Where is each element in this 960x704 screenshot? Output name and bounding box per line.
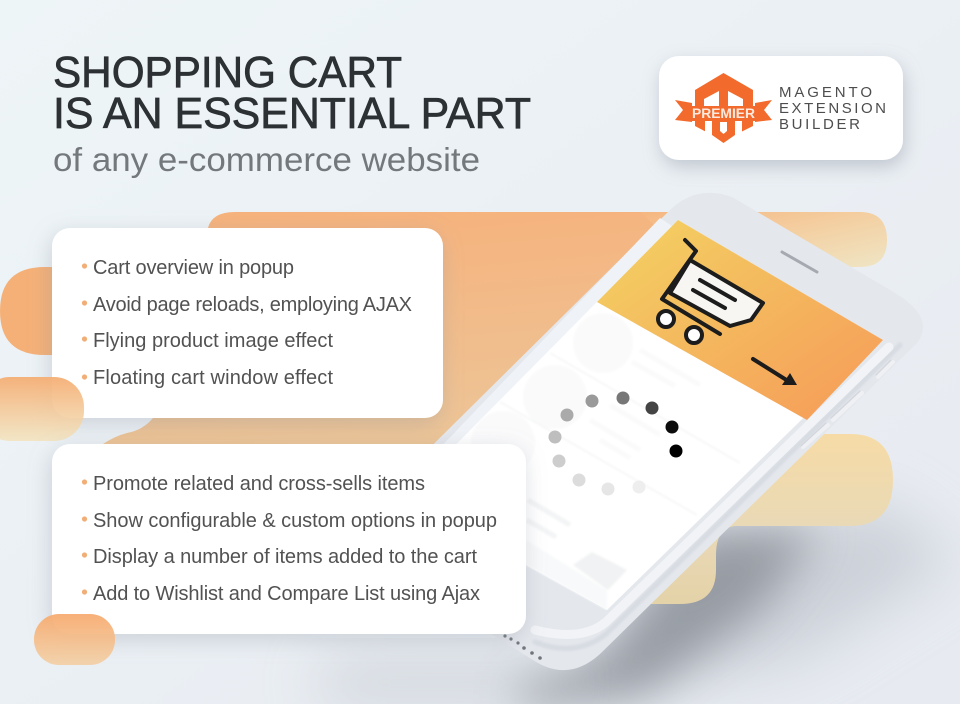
panel: features bottom <box>52 444 526 634</box>
phone <box>358 193 923 670</box>
list item: Add to Wishlist and Compare List using Ajax <box>93 583 480 605</box>
phone body <box>358 193 923 670</box>
icon: premier badge: PREMIER <box>692 106 755 121</box>
phone drop shadow <box>320 500 960 704</box>
phone inner light rim <box>390 218 672 508</box>
screen banner <box>597 220 883 420</box>
title <box>53 49 531 178</box>
small orange pill <box>34 614 115 665</box>
logo card <box>659 56 903 160</box>
logo text <box>779 84 886 133</box>
screen <box>411 220 883 610</box>
list item: Promote related and cross-sells items <box>93 473 425 495</box>
decorative orange shapes <box>0 212 893 604</box>
list item: Show configurable & custom options in popup <box>93 510 497 532</box>
title: IS AN ESSENTIAL PART <box>53 90 531 138</box>
speaker holes <box>503 634 542 660</box>
icon: arrow <box>753 359 797 385</box>
logo text: EXTENSION <box>779 100 886 117</box>
icon: premier badge <box>675 73 772 143</box>
small translucent pill <box>0 377 84 441</box>
list item: Floating cart window effect <box>93 367 333 389</box>
loading spinner dots <box>548 392 682 496</box>
list item: Cart overview in popup <box>93 257 294 279</box>
panel: features top <box>52 228 443 418</box>
list item: Flying product image effect <box>93 330 333 352</box>
list item: Display a number of items added to the cart <box>93 546 477 568</box>
faint screen content <box>471 313 740 610</box>
logo text: BUILDER <box>779 116 860 133</box>
side buttons <box>801 360 893 447</box>
phone rim bands <box>535 345 900 648</box>
list item: Avoid page reloads, employing AJAX <box>93 294 412 316</box>
speaker <box>782 252 817 272</box>
title: SHOPPING CART <box>53 49 402 97</box>
icon: shopping cart <box>658 240 763 343</box>
title: of any e-commerce website <box>53 141 480 178</box>
logo text: MAGENTO <box>779 84 872 101</box>
